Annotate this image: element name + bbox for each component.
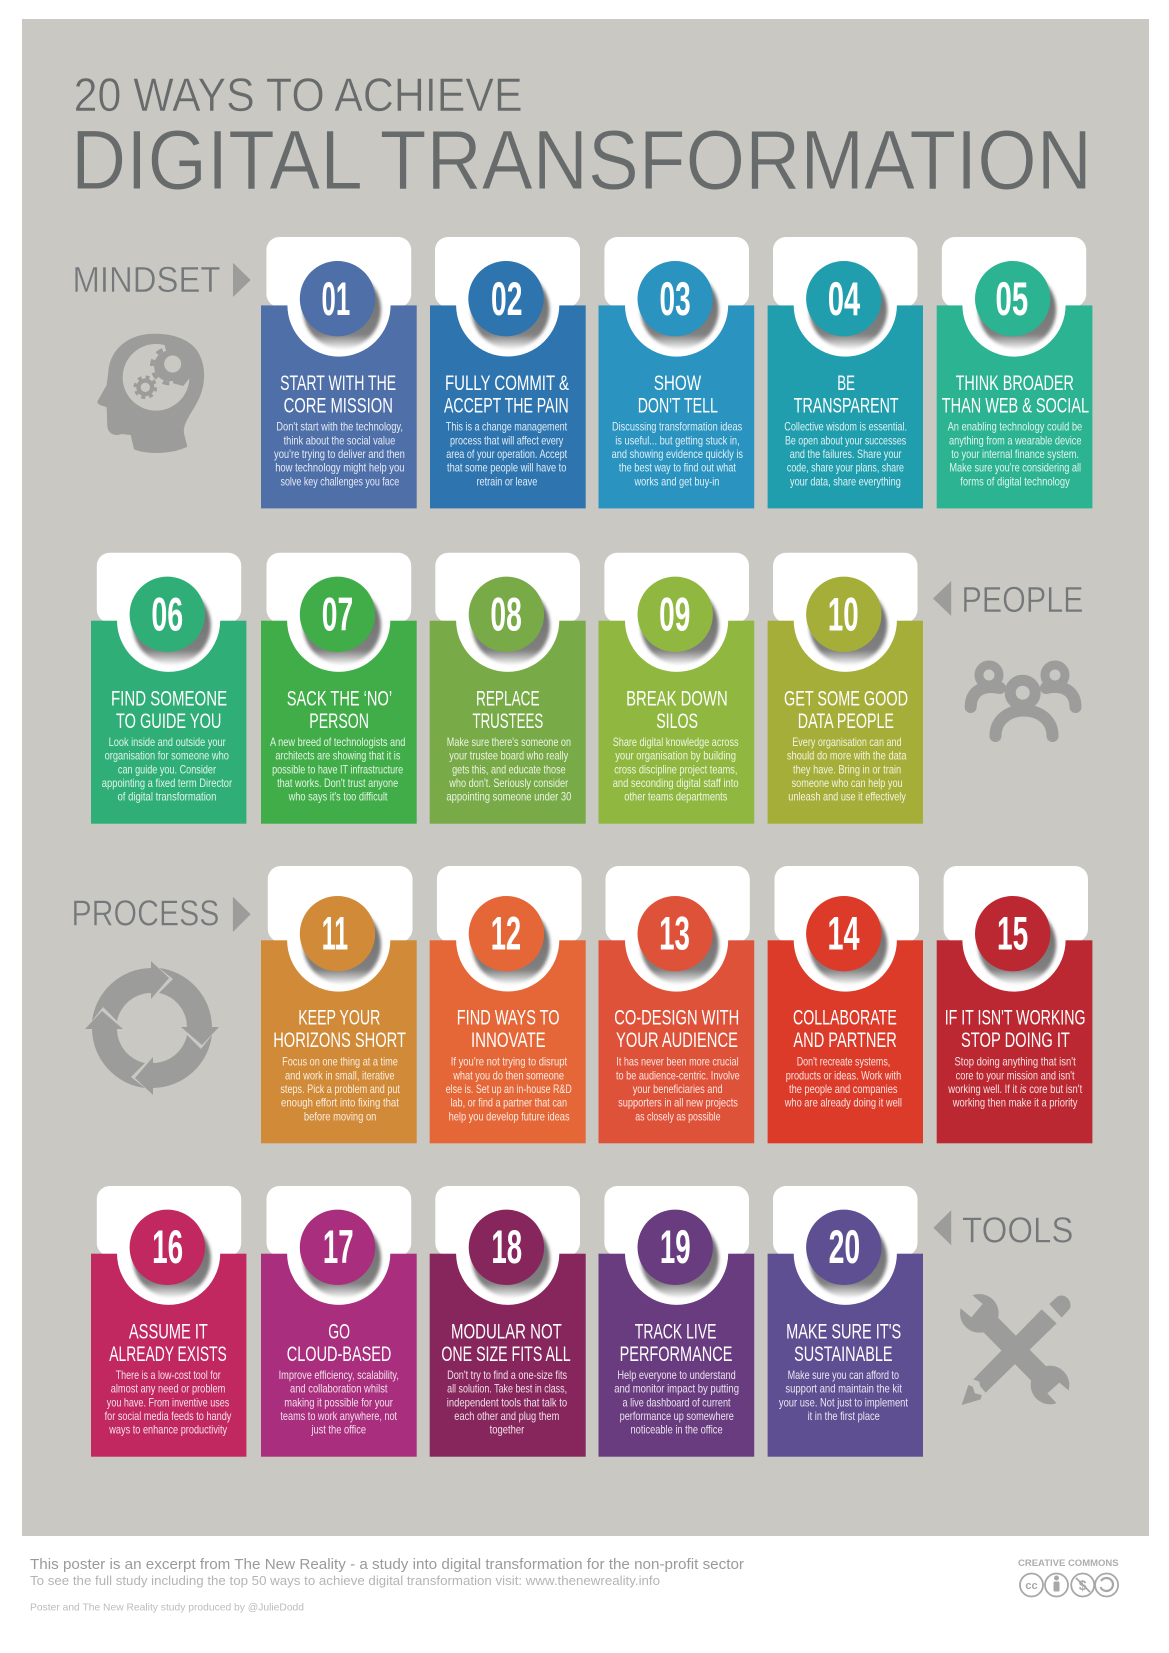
description: your data, share everything (790, 474, 901, 488)
heading: DATA PEOPLE (798, 710, 894, 733)
description: noticeable in the office (630, 1423, 723, 1437)
heading: YOUR AUDIENCE (616, 1029, 738, 1052)
heading: FULLY COMMIT & (445, 372, 569, 395)
number badge (469, 577, 550, 664)
footer text: This poster is an excerpt from The New Reality - a study into digital transformation for the non-profit sector (30, 1556, 744, 1573)
description: core to your mission and isn't (956, 1068, 1075, 1082)
description: as closely as possible (635, 1109, 721, 1123)
number badge: 10 (828, 588, 859, 641)
description: If you're not trying to disrupt (451, 1055, 568, 1069)
card 17 (261, 1186, 417, 1457)
card 20 (768, 1186, 923, 1457)
heading: THAN WEB & SOCIAL (942, 394, 1089, 417)
heading (794, 372, 899, 417)
number badge: 20 (829, 1220, 860, 1273)
card shape (91, 553, 246, 824)
card shape (768, 1186, 923, 1457)
heading (638, 372, 718, 417)
number badge (130, 577, 211, 664)
heading (784, 688, 908, 733)
description: each other and plug them (454, 1409, 559, 1423)
description: who don't. Seriously consider (449, 776, 568, 790)
number badge: 05 (996, 272, 1028, 325)
heading: DON'T TELL (638, 394, 718, 417)
heading (942, 372, 1089, 417)
card shape (430, 1186, 586, 1457)
description (105, 1368, 231, 1437)
description: organisation for someone who (105, 749, 229, 763)
description: forms of digital technology (960, 474, 1070, 488)
heading: GO (328, 1321, 350, 1344)
description: Discussing transformation ideas (612, 420, 742, 434)
heading (273, 1007, 406, 1052)
description: process that will affect every (450, 433, 563, 447)
heading (111, 688, 227, 733)
number badge (975, 261, 1056, 349)
number badge (638, 896, 719, 984)
number badge (638, 577, 719, 664)
description: should do more with the data (787, 749, 907, 763)
description: Don't start with the technology, (276, 420, 403, 434)
creative commons badge: cc (1025, 1580, 1038, 1592)
description: how technology might help you (275, 461, 404, 475)
number badge: 18 (491, 1220, 522, 1273)
description: supporters in all new projects (618, 1096, 738, 1110)
section label: mindset: MINDSET (72, 259, 221, 300)
section label: tools: TOOLS (962, 1210, 1074, 1251)
heading: PERSON (309, 710, 369, 733)
description: Don't recreate systems, (797, 1055, 890, 1069)
description (270, 735, 405, 804)
heading: KEEP YOUR (298, 1007, 380, 1030)
description: works and get buy-in (634, 474, 719, 488)
card shape (430, 237, 586, 508)
description: and monitor impact by putting (614, 1382, 739, 1396)
description: and seconding digital staff into (613, 776, 739, 790)
card shape (598, 866, 754, 1143)
heading (786, 1321, 901, 1366)
card 03 (598, 237, 754, 508)
description: that works. Don't trust anyone (277, 776, 398, 790)
heading: MODULAR NOT (451, 1321, 562, 1344)
creative commons badge (1018, 1558, 1119, 1596)
number badge (300, 261, 381, 349)
heading (287, 1321, 391, 1366)
icon: head with gears (97, 334, 204, 453)
card shape (261, 1186, 417, 1457)
description (612, 420, 743, 488)
number badge (806, 896, 887, 984)
description: the best way to find out what (619, 461, 737, 475)
heading: ONE SIZE FITS ALL (441, 1343, 571, 1366)
description: your trustee board who really (449, 749, 568, 763)
icon: people (971, 665, 1076, 736)
icon: wrench and pencil (953, 1288, 1077, 1412)
footer text (30, 1556, 744, 1614)
number badge (638, 261, 719, 349)
heading: AND PARTNER (793, 1029, 897, 1052)
description: who says it's too difficult (288, 790, 388, 804)
heading: FIND SOMEONE (111, 688, 227, 711)
description: appointing someone under 30 (446, 790, 572, 804)
number badge: 12 (491, 906, 521, 959)
card 09 (598, 553, 754, 824)
description: other teams departments (624, 790, 727, 804)
heading (793, 1007, 897, 1052)
description (787, 735, 907, 804)
heading: HORIZONS SHORT (273, 1029, 406, 1052)
heading: PERFORMANCE (620, 1343, 732, 1366)
number badge (469, 1210, 550, 1297)
description: who are already doing it well (784, 1096, 902, 1110)
number badge (130, 1210, 211, 1297)
title (71, 68, 1092, 207)
description: A new breed of technologists and (270, 735, 405, 749)
card shape (768, 866, 923, 1143)
description (616, 1055, 740, 1123)
heading: BREAK DOWN (626, 688, 728, 711)
footer text: To see the full study including the top 50 ways to achieve digital transformation visit: www.thenewreality.info (30, 1573, 660, 1588)
description (446, 735, 572, 804)
heading (441, 1321, 571, 1366)
heading: CORE MISSION (284, 394, 393, 417)
description: Share digital knowledge across (613, 735, 739, 749)
number badge: 15 (997, 906, 1028, 959)
description: This is a change management (446, 420, 568, 434)
number badge: 03 (660, 272, 691, 325)
description: just the office (311, 1423, 366, 1437)
card shape (430, 553, 586, 824)
card shape (598, 1186, 754, 1457)
number badge (806, 577, 887, 664)
card 16 (91, 1186, 246, 1457)
description: together (490, 1423, 524, 1437)
description: Make sure you're considering all (949, 461, 1081, 475)
number badge (300, 577, 381, 664)
heading (287, 688, 392, 733)
description: you have. From inventive uses (107, 1395, 229, 1409)
creative commons badge: $ (1079, 1577, 1087, 1593)
description (784, 420, 907, 488)
number badge: 01 (322, 272, 350, 325)
description: and showing evidence quickly is (612, 447, 743, 461)
description: An enabling technology could be (948, 420, 1082, 434)
heading: COLLABORATE (793, 1007, 897, 1030)
heading (444, 372, 569, 417)
heading: THINK BROADER (956, 372, 1074, 395)
heading: SHOW (654, 372, 701, 395)
heading: SUSTAINABLE (794, 1343, 892, 1366)
card 11 (261, 866, 417, 1143)
heading: SILOS (656, 710, 698, 733)
number badge: 08 (490, 588, 522, 641)
description: is useful... but getting stuck in, (615, 433, 740, 447)
description: the people and companies (789, 1082, 898, 1096)
description: code, share your plans, share (787, 461, 904, 475)
description: almost any need or problem (111, 1382, 225, 1396)
description: Help everyone to understand (617, 1368, 736, 1382)
description: a live dashboard of current (622, 1395, 731, 1409)
description: and work in small, iterative (285, 1068, 395, 1082)
description: performance up somewhere (620, 1409, 734, 1423)
title: DIGITAL TRANSFORMATION (71, 113, 1092, 207)
heading (626, 688, 728, 733)
number badge (975, 896, 1056, 984)
number badge: 07 (322, 588, 353, 641)
description (614, 1368, 739, 1437)
description: it in the first place (808, 1409, 880, 1423)
heading: BE (837, 372, 855, 395)
description (784, 1055, 902, 1110)
description: someone who can help you (792, 776, 903, 790)
description: think about the social value (284, 433, 396, 447)
description (447, 1368, 567, 1437)
description: your beneficiaries and (633, 1082, 723, 1096)
heading: GET SOME GOOD (784, 688, 908, 711)
description: steps. Pick a problem and put (280, 1082, 400, 1096)
card 18 (430, 1186, 586, 1457)
card shape (261, 237, 417, 508)
heading: STOP DOING IT (961, 1029, 1070, 1052)
description: unleash and use it effectively (788, 790, 906, 804)
number badge (468, 261, 550, 349)
heading: FIND WAYS TO (457, 1007, 560, 1030)
title: 20 WAYS TO ACHIEVE (74, 68, 523, 121)
heading (620, 1321, 732, 1366)
description: lab, or find a partner that can (450, 1096, 567, 1110)
description: Every organisation can and (792, 735, 902, 749)
description: appointing a fixed term Director (102, 776, 232, 790)
description: products or ideas. Work with (786, 1068, 901, 1082)
description: Focus on one thing at a time (282, 1055, 398, 1069)
card 07 (261, 553, 417, 824)
heading: TRUSTEES (472, 710, 543, 733)
card 02 (430, 237, 586, 508)
card shape (937, 866, 1092, 1143)
card 05 (937, 237, 1092, 508)
card 12 (430, 866, 586, 1143)
description (102, 735, 232, 804)
card 10 (768, 553, 923, 824)
number badge: 04 (828, 272, 860, 325)
description: Collective wisdom is essential. (784, 420, 907, 434)
description: to your internal finance system. (951, 447, 1079, 461)
description: Improve efficiency, scalability, (279, 1368, 399, 1382)
description: ways to enhance productivity (109, 1423, 227, 1437)
description: and collaboration whilst (290, 1382, 388, 1396)
description (613, 735, 739, 804)
number badge: 02 (491, 272, 522, 325)
number badge: 19 (660, 1220, 691, 1273)
description: working then make it a priority (952, 1096, 1078, 1110)
heading (109, 1321, 227, 1366)
card 01 (261, 237, 417, 508)
number badge (806, 261, 887, 349)
description (446, 1055, 572, 1123)
section label: people: PEOPLE (962, 579, 1084, 620)
heading: ACCEPT THE PAIN (444, 394, 569, 417)
heading: CLOUD-BASED (287, 1343, 391, 1366)
heading (457, 1007, 560, 1052)
description: you're trying to deliver and then (274, 447, 405, 461)
number badge (300, 896, 381, 984)
card shape (430, 866, 586, 1143)
description: teams to work anywhere, not (280, 1409, 398, 1423)
heading: ALREADY EXISTS (109, 1343, 227, 1366)
heading: TRANSPARENT (794, 394, 899, 417)
heading: TRACK LIVE (635, 1321, 716, 1344)
description: solve key challenges you face (280, 474, 399, 488)
description: independent tools that talk to (447, 1395, 567, 1409)
description: making it possible for your (284, 1395, 393, 1409)
description: enough effort into fixing that (281, 1096, 399, 1110)
description: support and maintain the kit (785, 1382, 902, 1396)
number badge: 16 (152, 1220, 183, 1273)
description: can guide you. Consider (118, 762, 216, 776)
heading: ASSUME IT (129, 1321, 208, 1344)
heading (472, 688, 543, 733)
description: area of your operation. Accept (446, 447, 568, 461)
description: else is. Set up an in-house R&D (446, 1082, 572, 1096)
card 14 (768, 866, 923, 1143)
footer text: Poster and The New Reality study produced by @JulieDodd (30, 1602, 304, 1614)
card 19 (598, 1186, 754, 1457)
number badge: 09 (659, 588, 690, 641)
description: possible to have IT infrastructure (272, 762, 403, 776)
description: that some people will have to (447, 461, 567, 475)
card shape (937, 237, 1092, 508)
number badge (300, 1210, 381, 1297)
description: Make sure there's someone on (447, 735, 571, 749)
description: before moving on (304, 1109, 376, 1123)
number badge: 13 (659, 906, 690, 959)
heading (945, 1007, 1086, 1052)
number badge: 17 (323, 1220, 354, 1273)
icon: cycle arrows (85, 961, 219, 1095)
description: Be open about your successes (785, 433, 906, 447)
description (948, 420, 1082, 488)
description: what you do then someone (452, 1068, 564, 1082)
card shape (598, 553, 754, 824)
description: help you develop future ideas (449, 1109, 570, 1123)
number badge: 11 (322, 906, 348, 959)
number badge (469, 896, 550, 984)
description: Look inside and outside your (109, 735, 226, 749)
card shape (768, 553, 923, 824)
description: Make sure you can afford to (788, 1368, 899, 1382)
creative commons badge: CREATIVE COMMONS (1018, 1558, 1119, 1569)
description: they have. Bring in or train (793, 762, 901, 776)
card shape (768, 237, 923, 508)
card 08 (430, 553, 586, 824)
heading: MAKE SURE IT'S (786, 1321, 901, 1344)
number badge: 14 (828, 906, 860, 959)
description (948, 1055, 1083, 1110)
description: anything from a wearable device (949, 433, 1082, 447)
card 06 (91, 553, 246, 824)
section label: process: PROCESS (72, 893, 220, 934)
description (274, 420, 405, 488)
number badge (806, 1210, 887, 1297)
description: There is a low-cost tool for (116, 1368, 221, 1382)
card 15 (937, 866, 1092, 1143)
description: of digital transformation (118, 790, 216, 804)
description (279, 1368, 399, 1437)
description: your organisation by building (615, 749, 736, 763)
heading: START WITH THE (280, 372, 396, 395)
description: and the failures. Share your (790, 447, 902, 461)
heading (280, 372, 396, 417)
heading: TO GUIDE YOU (116, 710, 221, 733)
description (446, 420, 568, 488)
description: It has never been more crucial (616, 1055, 739, 1069)
description: cross discipline project teams, (614, 762, 738, 776)
description: Don't try to find a one-size fits (447, 1368, 567, 1382)
card shape (91, 1186, 246, 1457)
description: working well. If it is core but isn't (948, 1082, 1083, 1096)
description: to be audience-centric. Involve (616, 1068, 740, 1082)
heading: INNOVATE (471, 1029, 546, 1052)
card shape (598, 237, 754, 508)
description: your use. Not just to implement (779, 1395, 909, 1409)
heading: CO-DESIGN WITH (614, 1007, 739, 1030)
card 04 (768, 237, 923, 508)
description: Stop doing anything that isn't (954, 1055, 1076, 1069)
description (280, 1055, 400, 1123)
description: all solution. Take best in class, (447, 1382, 567, 1396)
number badge: 06 (151, 588, 183, 641)
description (779, 1368, 909, 1423)
heading: SACK THE ‘NO’ (287, 688, 392, 711)
description: gets this, and educate those (452, 762, 566, 776)
heading: REPLACE (476, 688, 540, 711)
card shape (261, 866, 417, 1143)
card 13 (598, 866, 754, 1143)
heading: IF IT ISN'T WORKING (945, 1007, 1086, 1030)
description: retrain or leave (476, 474, 538, 488)
description: for social media feeds to handy (105, 1409, 231, 1423)
heading (614, 1007, 739, 1052)
number badge (638, 1210, 719, 1297)
card shape (261, 553, 417, 824)
description: architects are showing that it is (275, 749, 400, 763)
